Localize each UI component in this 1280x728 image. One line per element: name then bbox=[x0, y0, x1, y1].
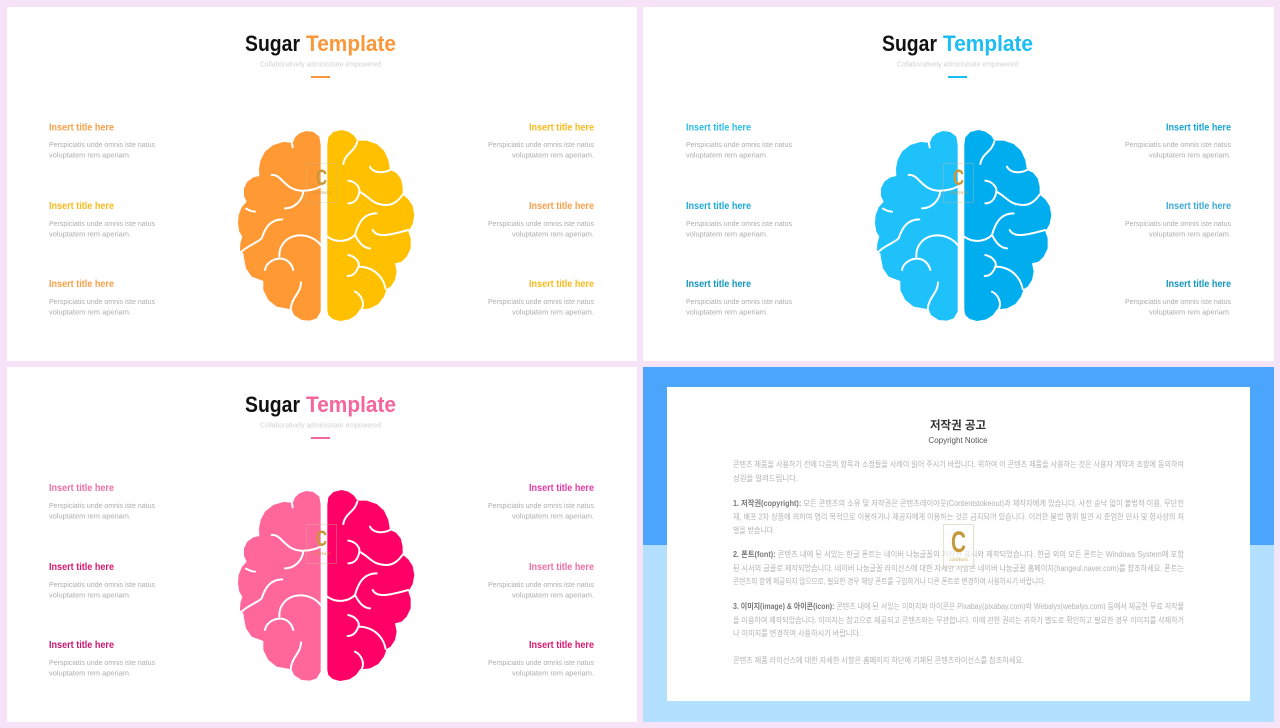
notice section 3: image and icon: 나 이미지를 변경하여 사용하시기 바랍니다. bbox=[733, 628, 861, 638]
item: right 2 bbox=[488, 561, 594, 600]
item: right 2 bbox=[488, 200, 594, 238]
item: right 2: voluptatem rem aperiam. bbox=[1149, 230, 1231, 238]
title: Sugar bbox=[245, 392, 300, 417]
brain illustration bbox=[238, 490, 414, 681]
item: right 3: Insert title here bbox=[1166, 278, 1231, 290]
item: right 1: voluptatem rem aperiam. bbox=[1149, 150, 1231, 160]
item: right 1 bbox=[1125, 122, 1231, 160]
item: left 1: voluptatem rem aperiam. bbox=[49, 150, 131, 160]
watermark: C bbox=[316, 526, 327, 551]
item: left 2: voluptatem rem aperiam. bbox=[686, 230, 768, 238]
notice intro: 콘텐츠 제품을 사용하기 전에 다음의 항목과 소정들을 사례이 읽어 주시기 바랍니다. 위하여 이 콘텐츠 제품을 사용하는 것은 사용자 계약과 조항에 동의하여 bbox=[733, 459, 1184, 469]
item: left 2 bbox=[49, 200, 155, 238]
title: Sugar bbox=[245, 31, 300, 56]
watermark bbox=[944, 164, 974, 202]
item: right 1: Perspiciatis unde omnis iste natus bbox=[488, 140, 594, 149]
notice heading: 저작권 공고 bbox=[930, 418, 986, 432]
subtitle: Collaboratively administrate empowered bbox=[260, 422, 381, 430]
notice section 1: copyright: 벌을 받습니다. bbox=[733, 525, 775, 535]
item: left 3: Insert title here bbox=[686, 278, 751, 290]
watermark: C bbox=[953, 165, 964, 190]
item: left 2 bbox=[686, 200, 792, 238]
item: left 3 bbox=[686, 278, 792, 316]
notice section 1: copyright: 재, 배포 2차 상품에 의하여 영리 목적으로 이용하거나 제공자에게 이용하는 것은 금지되어 있습니다. 이러한 불법 행위 발견 시 준엄한 민사 및 형사상의 처 bbox=[733, 512, 1184, 522]
brain illustration bbox=[875, 130, 1051, 321]
notice section 1: copyright: 1. 저작권(copyright): 모든 콘텐츠의 소유 및 저작권은 콘텐츠레이아웃(Contentstokeout)과 제작자에게 있습니다. 사전 승낙 없이 불법적 이용, 무단전 bbox=[733, 498, 1184, 508]
item: left 1: Insert title here bbox=[49, 482, 114, 494]
item: left 3: voluptatem rem aperiam. bbox=[49, 668, 131, 678]
item: left 1: Insert title here bbox=[49, 122, 114, 134]
item: left 1: Insert title here bbox=[686, 122, 751, 134]
item: right 1: Insert title here bbox=[529, 482, 594, 494]
item: right 1: voluptatem rem aperiam. bbox=[512, 150, 594, 160]
item: left 3 bbox=[49, 278, 155, 316]
title: Template bbox=[306, 31, 396, 56]
watermark: CONTENTS bbox=[949, 191, 969, 195]
title: Template bbox=[306, 392, 396, 417]
notice intro: 성원을 알려드립니다. bbox=[733, 473, 798, 483]
watermark: CONTENTS bbox=[312, 552, 332, 556]
watermark: C bbox=[951, 526, 966, 559]
accent bar bbox=[311, 76, 330, 78]
item: left 3: Perspiciatis unde omnis iste natus bbox=[49, 658, 155, 667]
item: right 2: Perspiciatis unde omnis iste natus bbox=[1125, 219, 1231, 228]
watermark: C bbox=[316, 165, 327, 190]
notice section 1: copyright bbox=[733, 498, 1184, 535]
item: left 1 bbox=[686, 122, 792, 160]
item: right 1: Perspiciatis unde omnis iste natus bbox=[488, 501, 594, 510]
title bbox=[245, 392, 396, 417]
item: left 3: voluptatem rem aperiam. bbox=[49, 308, 131, 316]
item: left 2 bbox=[49, 561, 155, 600]
notice section 3: image and icon: 을 이용하여 제작되었습니다. 이미지는 참고으로 제공되고 콘텐츠와는 무관합니다. 이에 관한 권리는 귀하가 별도로 확인하고 필요한 경우 이미지를 삭제하거 bbox=[733, 615, 1184, 625]
notice section 2: font: 콘텐츠의 함께 제공되지 않으므로, 필요한 경우 해당 폰트를 구입하거나 다른 폰트로 변경하여 사용하시기 바랍니다. bbox=[733, 576, 1046, 586]
item: right 1: Insert title here bbox=[1166, 122, 1231, 134]
item: left 3: Perspiciatis unde omnis iste natus bbox=[686, 297, 792, 306]
item: left 2: Insert title here bbox=[49, 200, 114, 212]
item: right 1: voluptatem rem aperiam. bbox=[512, 512, 594, 520]
accent bar bbox=[311, 437, 330, 439]
notice section 3: image and icon: 3. 이미지(image) & 아이콘(icon): 콘텐츠 내에 된 서있는 이미지와 아이콘은 Pixabay(pixabay.com)와 Webalys(webalys.com) 등에서 제공한 무료 저작물 bbox=[733, 601, 1184, 611]
item: left 1: Perspiciatis unde omnis iste natus bbox=[49, 501, 155, 510]
title: Sugar bbox=[882, 31, 937, 56]
item: left 2: Perspiciatis unde omnis iste natus bbox=[686, 219, 792, 228]
item: left 1: Perspiciatis unde omnis iste natus bbox=[686, 140, 792, 149]
item: left 3: Insert title here bbox=[49, 278, 114, 290]
notice section 2: font: 2. 폰트(font): 콘텐츠 내에 된 서있는 한글 폰트는 네이버 나눔글꼴의 저작권 표시와 제작되었습니다. 한글 외의 모든 폰트는 Windows System에 포함 bbox=[733, 549, 1185, 559]
accent bar bbox=[948, 76, 967, 78]
subtitle: Collaboratively administrate empowered bbox=[260, 62, 381, 68]
item: right 3: voluptatem rem aperiam. bbox=[1149, 308, 1231, 316]
item: right 2: voluptatem rem aperiam. bbox=[512, 590, 594, 600]
item: left 1 bbox=[49, 122, 155, 160]
item: right 3: voluptatem rem aperiam. bbox=[512, 308, 594, 316]
item: right 3: voluptatem rem aperiam. bbox=[512, 668, 594, 678]
item: right 3: Insert title here bbox=[529, 278, 594, 290]
title bbox=[882, 31, 1033, 56]
watermark bbox=[306, 164, 336, 202]
title bbox=[245, 31, 396, 56]
subtitle: Collaboratively administrate empowered bbox=[897, 62, 1018, 68]
item: right 1: Perspiciatis unde omnis iste natus bbox=[1125, 140, 1231, 149]
item: right 2: Perspiciatis unde omnis iste natus bbox=[488, 219, 594, 228]
item: right 2: voluptatem rem aperiam. bbox=[512, 230, 594, 238]
item: left 2: Perspiciatis unde omnis iste natus bbox=[49, 219, 155, 228]
item: right 3 bbox=[488, 639, 594, 678]
item: right 3 bbox=[1125, 278, 1231, 316]
item: left 2: Insert title here bbox=[686, 200, 751, 212]
notice subheading: Copyright Notice bbox=[928, 436, 988, 445]
item: right 2 bbox=[1125, 200, 1231, 238]
item: right 1 bbox=[488, 122, 594, 160]
item: left 3: voluptatem rem aperiam. bbox=[686, 308, 768, 316]
item: left 1: Perspiciatis unde omnis iste natus bbox=[49, 140, 155, 149]
item: left 2: Perspiciatis unde omnis iste natus bbox=[49, 580, 155, 589]
item: left 1 bbox=[49, 482, 155, 520]
notice section 2: font bbox=[733, 549, 1185, 586]
item: left 3: Perspiciatis unde omnis iste natus bbox=[49, 297, 155, 306]
item: right 3 bbox=[488, 278, 594, 316]
watermark: CONTENTS bbox=[949, 558, 969, 562]
item: left 1: voluptatem rem aperiam. bbox=[49, 512, 131, 520]
notice intro bbox=[733, 459, 1184, 483]
item: right 1 bbox=[488, 482, 594, 520]
item: left 3: Insert title here bbox=[49, 639, 114, 651]
item: right 1: Insert title here bbox=[529, 122, 594, 134]
panel: blue brain slide bbox=[643, 7, 1274, 361]
panel: copyright notice bbox=[643, 367, 1274, 722]
watermark bbox=[306, 524, 336, 564]
title: Template bbox=[943, 31, 1033, 56]
item: right 3: Insert title here bbox=[529, 639, 594, 651]
panel: pink brain slide bbox=[7, 367, 637, 722]
item: right 2: Insert title here bbox=[529, 200, 594, 212]
item: right 3: Perspiciatis unde omnis iste natus bbox=[1125, 297, 1231, 306]
item: left 1: voluptatem rem aperiam. bbox=[686, 150, 768, 160]
item: right 2: Perspiciatis unde omnis iste natus bbox=[488, 580, 594, 589]
watermark bbox=[944, 524, 974, 566]
item: right 2: Insert title here bbox=[529, 561, 594, 573]
item: left 2: voluptatem rem aperiam. bbox=[49, 590, 131, 600]
item: right 3: Perspiciatis unde omnis iste natus bbox=[488, 658, 594, 667]
brain illustration bbox=[238, 130, 414, 321]
notice section 3: image and icon bbox=[733, 601, 1184, 638]
watermark: CONTENTS bbox=[312, 191, 332, 195]
panel: orange brain slide bbox=[7, 7, 637, 361]
item: right 3: Perspiciatis unde omnis iste natus bbox=[488, 297, 594, 306]
item: right 2: Insert title here bbox=[1166, 200, 1231, 212]
notice footer: 콘텐츠 제품 라이선스에 대한 자세한 사항은 홈페이지 하단에 기재된 콘텐츠라이선스를 참조하세요. bbox=[733, 655, 1024, 665]
notice section 2: font: 된 시서의 글꼴로 제작되었습니다. 네이버 나눔글꼴 라이선스에 대한 자세한 사항은 네이버 나눔글꼴 홈페이지(hangeul.naver.com)를 참조하세요. 폰트는 bbox=[733, 563, 1184, 573]
item: left 2: voluptatem rem aperiam. bbox=[49, 230, 131, 238]
item: left 2: Insert title here bbox=[49, 561, 114, 573]
item: left 3 bbox=[49, 639, 155, 678]
